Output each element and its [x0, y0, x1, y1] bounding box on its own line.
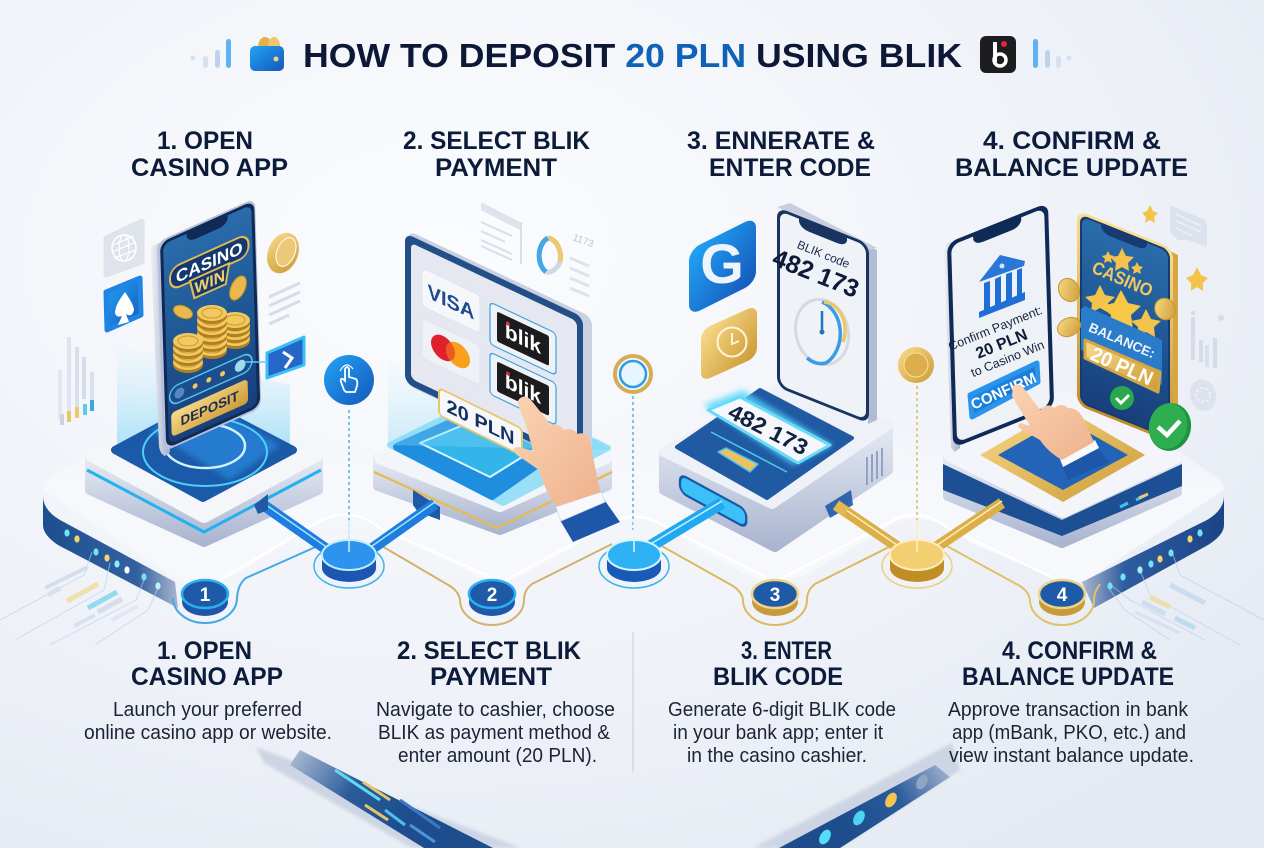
module 3 box — [664, 390, 888, 547]
side document decor — [481, 202, 521, 264]
step 4 caption: app (mBank, PKO, etc.) and — [952, 722, 1186, 744]
chart label 1173: 1173 — [571, 232, 595, 250]
step 3 caption: in the casino cashier. — [687, 745, 867, 767]
left platform edge with LEDs — [43, 496, 178, 608]
confirm text: 20 PLN — [973, 326, 1030, 363]
right data traces — [1110, 552, 1264, 645]
step headings top: 2. SELECT BLIK — [403, 127, 590, 155]
left signal bars — [190, 39, 231, 68]
amount tag: 20 PLN — [446, 396, 514, 450]
cyan slot — [680, 474, 746, 528]
code entry field: 482 173 — [724, 399, 812, 460]
blue inner pad — [998, 418, 1128, 490]
main platform — [43, 415, 1224, 608]
balance card: BALANCE: — [1086, 320, 1157, 361]
step 4 caption: view instant balance update. — [949, 745, 1194, 767]
step 4 caption: Approve transaction in bank — [948, 699, 1189, 721]
step headings top: PAYMENT — [435, 154, 557, 182]
confirm button: CONFIRM — [968, 370, 1039, 414]
module 1 base — [87, 395, 321, 542]
gold connector slot — [825, 490, 853, 518]
module 4 base — [943, 396, 1182, 543]
step headings top: BALANCE UPDATE — [955, 154, 1188, 182]
bottom left strip — [256, 747, 521, 848]
step node 1 — [182, 580, 228, 616]
right signal bars — [1033, 39, 1072, 68]
blik card bottom — [490, 352, 556, 425]
step 3 caption — [668, 637, 896, 767]
balance card: 20 PLN — [1087, 343, 1156, 390]
step 2 caption — [376, 637, 615, 767]
phone: casino app — [151, 198, 261, 456]
sleeve — [560, 498, 620, 542]
junction 3 — [882, 520, 952, 588]
step 1 caption: CASINO APP — [131, 663, 283, 691]
gold connectors — [836, 501, 1002, 560]
step 2 caption: 2. SELECT BLIK — [397, 637, 581, 665]
step 4 caption: BALANCE UPDATE — [962, 663, 1174, 691]
casino win logo — [170, 234, 249, 309]
blik card top: blik — [505, 318, 542, 359]
step 3 caption: BLIK CODE — [713, 663, 843, 691]
hand shape — [1012, 385, 1094, 460]
icon: bank — [979, 255, 1025, 318]
platform top surface — [43, 415, 1224, 583]
module 4 — [84, 203, 1224, 772]
holographic panel — [117, 345, 290, 448]
phone: BLIK code — [769, 203, 877, 424]
confirm text — [946, 303, 1057, 384]
step 2 caption: enter amount (20 PLN). — [398, 745, 597, 767]
step node 3: 3 — [770, 585, 780, 606]
step node 3 — [752, 580, 798, 616]
module 1 — [58, 198, 1224, 772]
gauge timer — [788, 293, 856, 371]
step 1 caption — [84, 637, 332, 744]
balance card — [1081, 306, 1162, 392]
phone: balance — [1012, 210, 1196, 480]
casino win logo: WIN — [194, 266, 225, 298]
blue pad with rings — [115, 403, 293, 498]
connector blue to module 3 — [634, 501, 722, 556]
code entry field — [703, 390, 833, 465]
step 4 caption — [948, 637, 1194, 767]
coin stacks — [171, 273, 250, 373]
blue connectors — [254, 494, 435, 565]
chat bubble — [1170, 205, 1207, 247]
deposit button — [171, 379, 248, 437]
step headings top: 3. ENNERATE & — [687, 127, 875, 155]
step node 2 — [469, 580, 515, 616]
sleeve and hand on module 2 — [514, 396, 620, 542]
confirm text: to Casino Win — [969, 338, 1046, 380]
icon: globe card — [106, 221, 142, 275]
step headings top: 1. OPEN — [157, 127, 253, 155]
module 2 base — [374, 395, 612, 530]
confirm text: Confirm Payment: — [946, 303, 1044, 354]
caption divider — [632, 632, 634, 772]
step headings top: CASINO APP — [131, 154, 288, 182]
icon: G app card: G — [700, 232, 744, 295]
step headings top: ENTER CODE — [709, 154, 871, 182]
step headings top — [131, 127, 1188, 182]
sleeve — [1062, 445, 1110, 480]
icon: wallet — [250, 37, 284, 71]
step 1 caption: Launch your preferred — [113, 699, 302, 721]
big check badge — [1144, 399, 1196, 455]
icon: spade card — [106, 278, 141, 330]
step 2 caption: PAYMENT — [430, 663, 552, 691]
step node 4: 4 — [1057, 585, 1068, 606]
visa card: VISA — [428, 281, 474, 324]
hand pressing confirm — [1012, 385, 1110, 480]
gold connector tip — [836, 505, 846, 512]
phone code text: BLIK code — [795, 238, 852, 271]
gold ring marker — [615, 356, 651, 392]
step 1 caption: online casino app or website. — [84, 722, 332, 744]
bottom right strip — [753, 743, 960, 848]
title bar — [190, 36, 1072, 74]
deposit button: DEPOSIT — [180, 387, 239, 429]
step 3 caption: Generate 6-digit BLIK code — [668, 699, 896, 721]
coins around phone — [1054, 275, 1179, 340]
icon: clock card — [701, 305, 757, 382]
step 3 caption: in your bank app; enter it — [673, 722, 883, 744]
right mini chart — [1191, 311, 1224, 368]
dotted guide 3 — [916, 386, 918, 540]
icon: finger tap circle — [324, 355, 374, 405]
junction 1 — [314, 520, 384, 588]
blik card bottom: blik — [505, 368, 542, 409]
phone code text: 482 173 — [769, 244, 863, 304]
holographic panel 2 — [388, 360, 608, 450]
reward pill — [169, 352, 252, 406]
step 2 caption: BLIK as payment method & — [378, 722, 611, 744]
gold button on pad — [711, 432, 787, 472]
junction 2 — [599, 520, 669, 588]
gold pad — [980, 407, 1145, 502]
icon: gold coin — [261, 228, 305, 278]
blik card top — [490, 302, 556, 375]
refresh badge — [1186, 376, 1220, 414]
step 4 caption: 4. CONFIRM & — [1002, 637, 1157, 665]
dotted guide 2 — [632, 396, 634, 530]
dotted guide 1 — [348, 410, 350, 540]
zigzag highlight line — [220, 515, 1062, 582]
casino word with stars: CASINO — [1089, 257, 1156, 301]
phone: confirm payment — [944, 203, 1057, 452]
small check — [1110, 386, 1134, 410]
module 2 — [374, 229, 612, 530]
step node 4 — [1039, 580, 1085, 616]
left data traces — [0, 552, 158, 645]
step 1 caption: 1. OPEN — [157, 637, 252, 665]
amount tag — [439, 388, 522, 456]
step 3 caption: 3. ENTER — [741, 637, 832, 665]
donut chart — [539, 238, 561, 272]
casino win logo: CASINO — [176, 238, 243, 287]
left mini chart — [58, 337, 94, 425]
casino word with stars — [1085, 248, 1161, 337]
icon: G app card — [689, 216, 756, 316]
step node 1: 1 — [200, 585, 211, 606]
module 3 — [664, 203, 888, 547]
payment tablet — [405, 229, 592, 472]
mastercard — [422, 318, 480, 385]
step node 2: 2 — [487, 585, 497, 606]
visa card — [422, 268, 480, 333]
decorative lines right — [570, 258, 589, 296]
vents — [867, 448, 882, 485]
step headings top: 4. CONFIRM & — [983, 127, 1161, 155]
gold coin marker — [898, 347, 934, 383]
step 2 caption: Navigate to cashier, choose — [376, 699, 615, 721]
stars decoration — [1142, 205, 1208, 291]
title text: HOW TO DEPOSIT 20 PLN USING BLIK — [303, 37, 962, 74]
right platform edge with LEDs — [1082, 496, 1224, 608]
connector slot left of module 2 — [413, 490, 440, 520]
decorative text lines — [269, 283, 300, 324]
hand — [514, 396, 601, 506]
icon: chevron card — [244, 337, 304, 378]
colored route lines — [173, 544, 1100, 625]
icon: BLIK logo — [980, 36, 1016, 73]
